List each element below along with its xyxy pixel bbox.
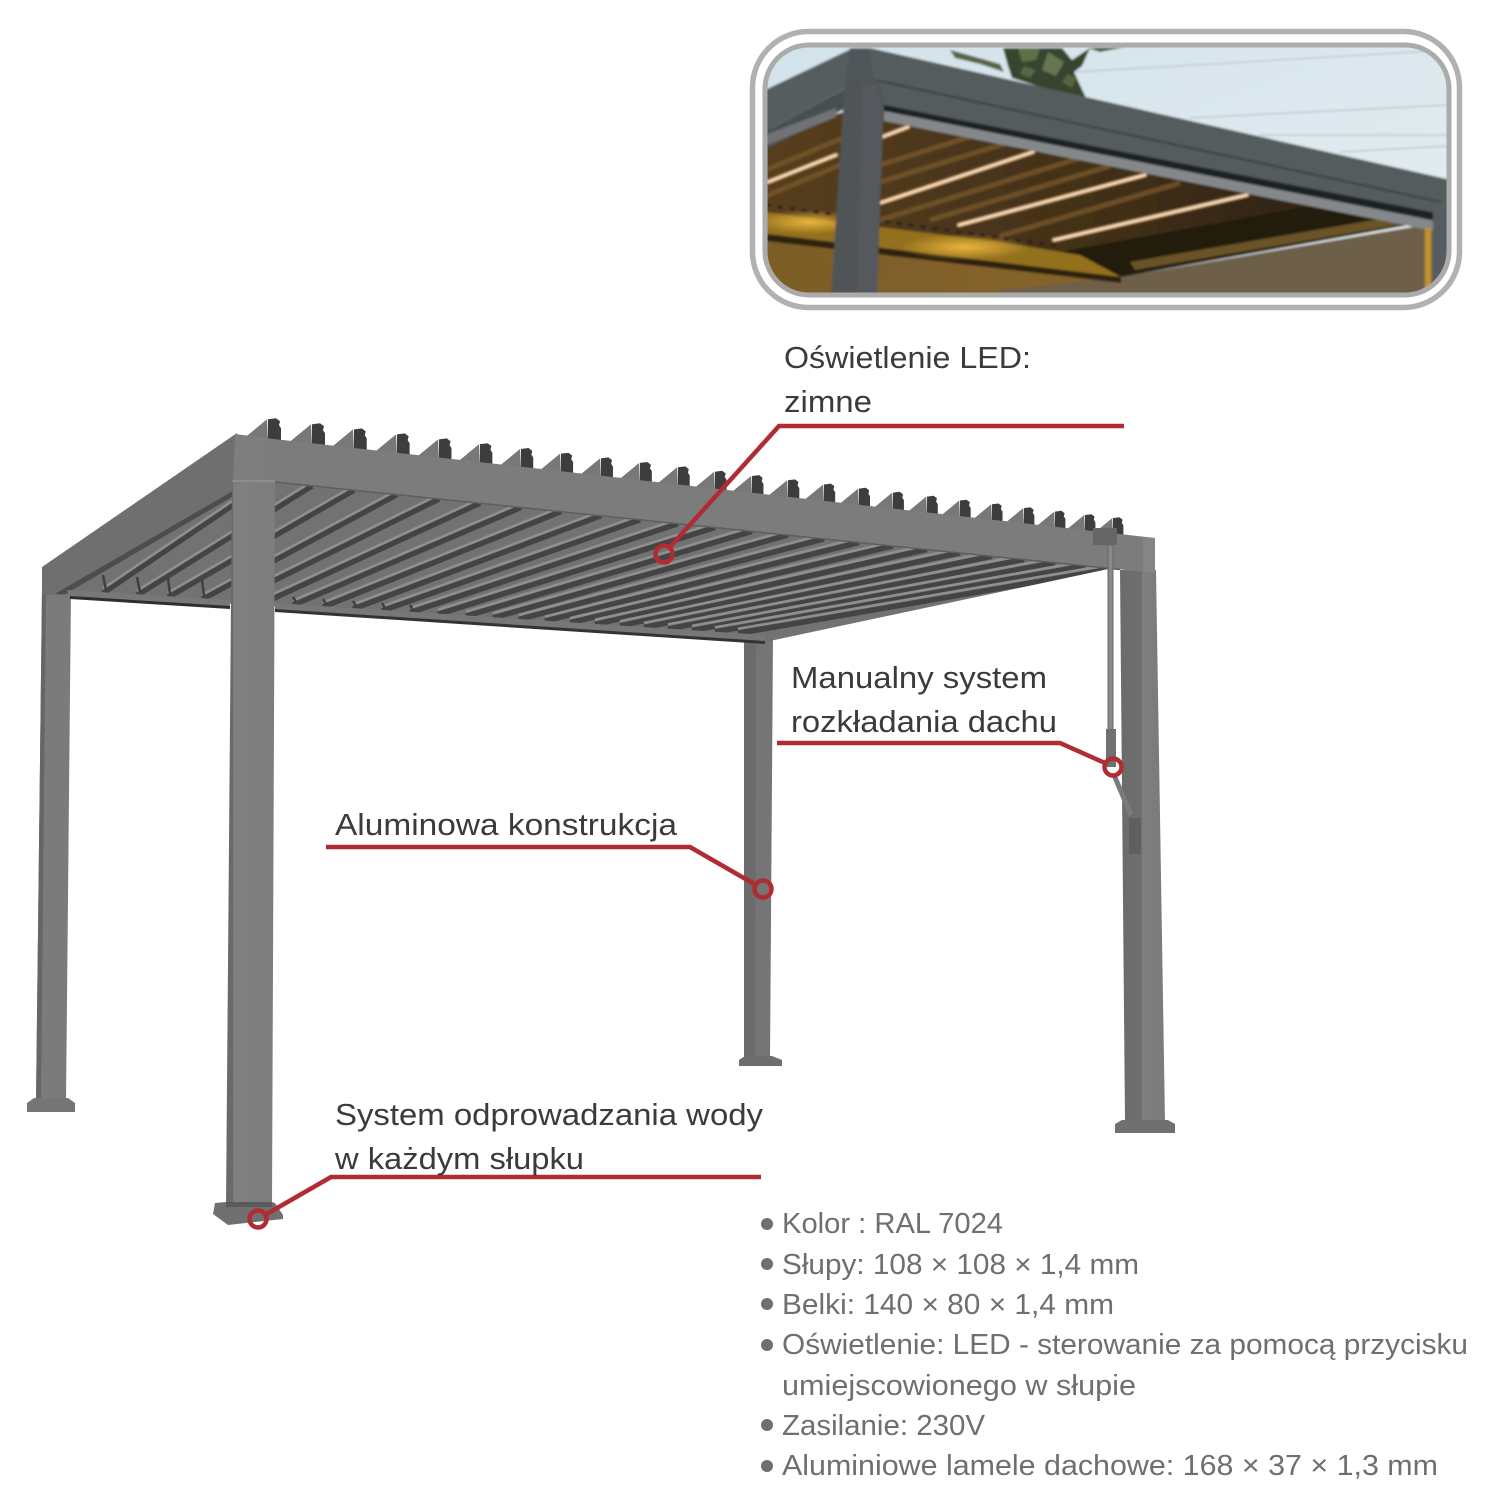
callout text: manual roof system: Manualny system	[791, 660, 1047, 695]
outer frame	[752, 32, 1460, 308]
back-left post	[27, 590, 75, 1112]
callout text: manual roof system	[791, 660, 1057, 739]
callout text: LED lighting: zimne	[784, 384, 872, 419]
front beam	[265, 438, 1155, 573]
inner frame	[765, 45, 1449, 295]
specification list: Słupy: 108 × 108 × 1,4 mm	[782, 1249, 1139, 1281]
callout text: manual roof system: rozkładania dachu	[791, 704, 1057, 739]
callout text: aluminium structure: Aluminowa konstrukcja	[335, 807, 678, 842]
rear centre post	[739, 636, 782, 1066]
specification list: umiejscowionego w słupie	[782, 1370, 1136, 1402]
specification list: Aluminiowe lamele dachowe: 168 × 37 × 1,3 mm	[782, 1450, 1438, 1482]
specification list: Belki: 140 × 80 × 1,4 mm	[782, 1289, 1114, 1321]
front post base	[213, 1202, 283, 1225]
callout text: LED lighting: Oświetlenie LED:	[784, 340, 1031, 375]
roof slat ends above front beam	[244, 418, 1123, 536]
specification list	[761, 1208, 1468, 1482]
callout line: manual roof system	[777, 743, 1122, 776]
rear beam	[67, 590, 765, 644]
left side beam	[42, 433, 238, 595]
callout text: water drainage: System odprowadzania wody	[335, 1097, 764, 1132]
right post	[1120, 570, 1165, 1122]
front corner post	[226, 434, 275, 1206]
right post base	[1115, 1120, 1175, 1133]
photo panel: LED-lit pergola roof	[752, 32, 1460, 308]
callout text: LED lighting	[784, 340, 1031, 419]
pergola illustration	[27, 418, 1175, 1225]
specification list: Zasilanie: 230V	[782, 1410, 986, 1442]
manual roof mechanism	[1093, 528, 1141, 854]
specification list: Oświetlenie: LED - sterowanie za pomocą przycisku	[782, 1329, 1468, 1361]
callout text: water drainage: w każdym słupku	[334, 1141, 584, 1176]
callout line: LED lighting	[656, 426, 1124, 562]
callout line: aluminium structure	[326, 847, 772, 898]
specification list: Kolor : RAL 7024	[782, 1208, 1003, 1240]
callout text: water drainage	[334, 1097, 764, 1176]
photo	[755, 45, 1451, 295]
callout line: water drainage	[250, 1177, 761, 1228]
louvred roof slats	[53, 474, 1122, 642]
